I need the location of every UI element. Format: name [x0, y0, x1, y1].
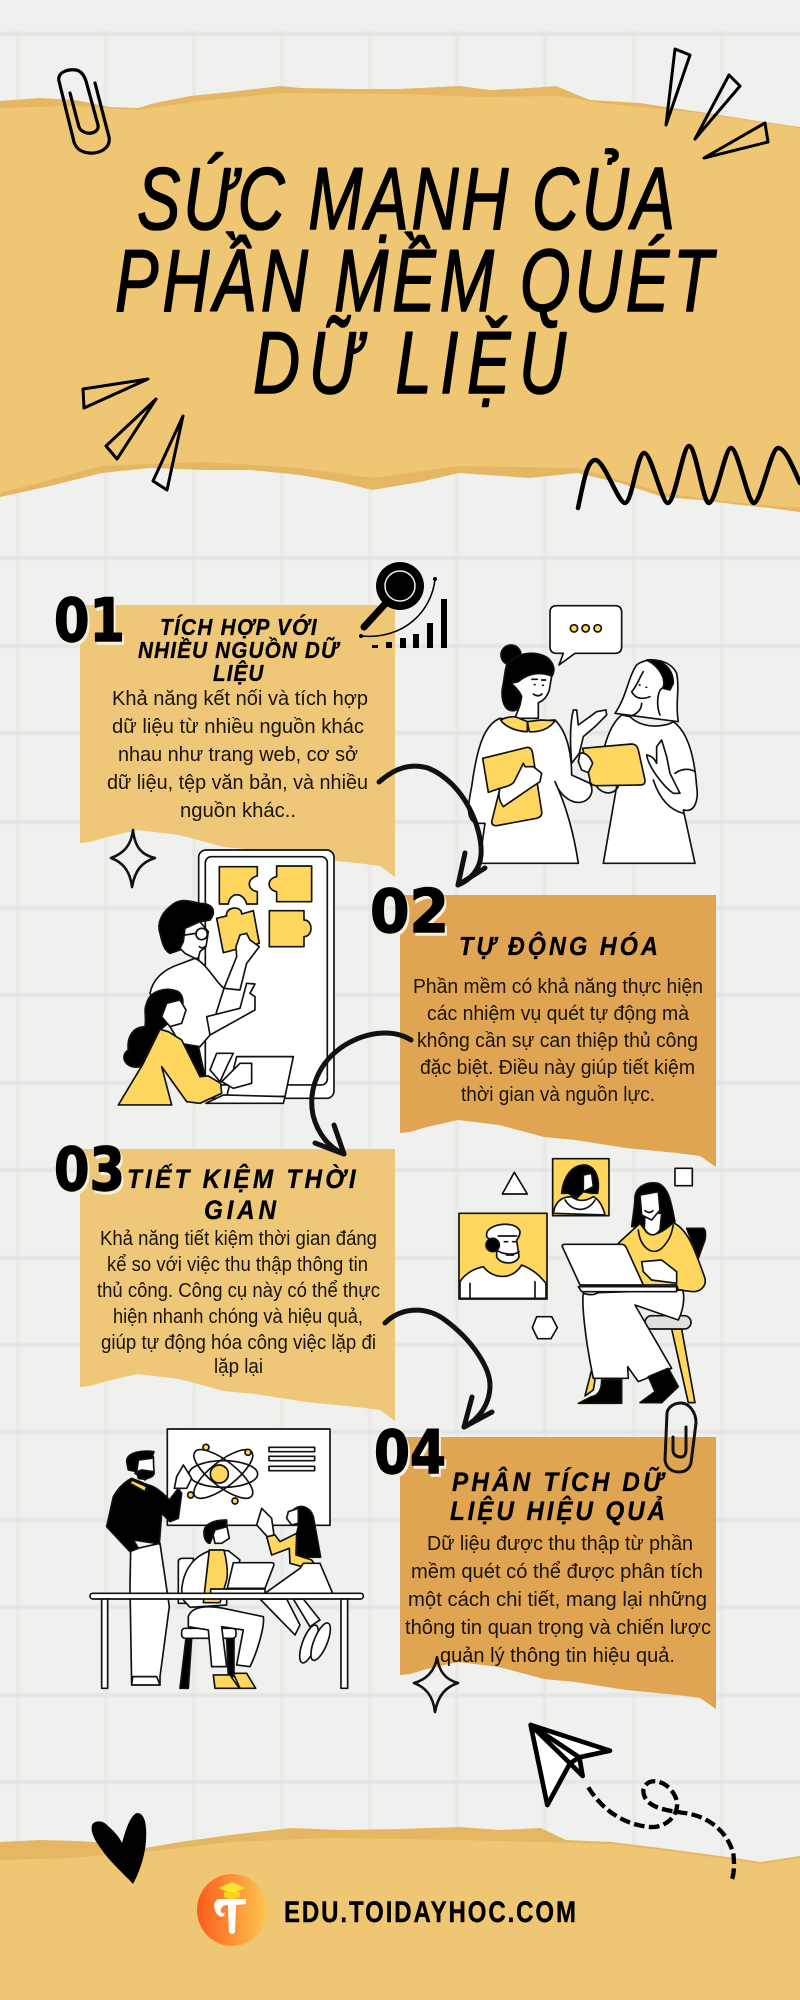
number 01: 01 [54, 586, 125, 656]
standing man [150, 901, 259, 1077]
panel 3 body text: lặp lại [214, 1356, 263, 1378]
illustration: puzzle board team [118, 850, 334, 1105]
website text: EDU.TOIDAYHOC.COM [284, 1894, 576, 1929]
panel 3 body text: giúp tự động hóa công việc lặp đi [101, 1332, 376, 1354]
panel 1 body text: nguồn khác.. [180, 800, 296, 822]
icon: paperclip right [665, 1403, 696, 1472]
panel 3 body text: Khả năng tiết kiệm thời gian đáng [100, 1228, 377, 1250]
left woman [469, 645, 607, 863]
seated man [178, 1520, 264, 1688]
arrow 2 to 3 [312, 1033, 411, 1154]
panel 4 body text: quản lý thông tin hiệu quả. [440, 1645, 675, 1667]
icon: heart [92, 1813, 146, 1884]
video frame: woman [553, 1159, 609, 1216]
illustration: woman on video call [459, 1159, 706, 1403]
icon: paper plane [531, 1725, 610, 1805]
whiteboard with atom [167, 1429, 330, 1525]
panel 2 body text: không cần sự can thiệp thủ công [417, 1030, 698, 1052]
icon: paperclip top-left [59, 70, 109, 153]
number 03: 03 [54, 1135, 125, 1205]
number 04: 04 [376, 1421, 448, 1491]
panel 1 heading: TÍCH HỢP VỚI [160, 614, 317, 640]
panel 1 body text [107, 688, 368, 822]
panel 1 heading: NHIỀU NGUỒN DỮ [138, 637, 341, 663]
panel 2 body text: đặc biệt. Điều này giúp tiết kiệm [420, 1057, 695, 1079]
number 01: 01 [56, 589, 127, 659]
panel 4 body text: Dữ liệu được thu thập từ phần [427, 1533, 693, 1555]
illustration: two women talking [469, 606, 697, 863]
panel 2: background paper [400, 895, 716, 1167]
board [199, 850, 334, 1098]
seated woman with laptop [562, 1183, 705, 1403]
video frame: man [459, 1213, 547, 1299]
chair [585, 1228, 706, 1403]
panel 4: background paper [400, 1437, 716, 1709]
panel 2 body text [413, 976, 703, 1106]
icon: magnifier and bar chart [359, 562, 447, 648]
panel 1 heading: LIỆU [213, 660, 265, 686]
panel 1 body text: dữ liệu từ nhiều nguồn khác [112, 716, 364, 738]
sitting woman [257, 1507, 334, 1665]
star 1 [111, 830, 155, 887]
panel 2 body text: các nhiệm vụ quét tự động mà [427, 1003, 690, 1025]
panel 3: background paper [80, 1149, 395, 1421]
arrow 3 to 4 [385, 1310, 492, 1427]
dashed flight path [588, 1781, 734, 1880]
standing man [107, 1451, 192, 1685]
table and laptop [90, 1563, 363, 1688]
panel 2 body text: Phần mềm có khả năng thực hiện [413, 976, 703, 998]
number 02: 02 [372, 880, 451, 950]
panel 4 body text: thông tin quan trọng và chiến lược [405, 1617, 711, 1639]
top banner: torn paper [0, 86, 800, 512]
number 04: 04 [374, 1418, 446, 1488]
number 03: 03 [56, 1138, 127, 1208]
panel 3 body text: hiện nhanh chóng và hiệu quả, [113, 1306, 363, 1328]
puzzle pieces [217, 866, 312, 953]
laptop [206, 1053, 293, 1103]
panel 1 body text: dữ liệu, tệp văn bản, và nhiều [107, 772, 368, 794]
panel 4 body text: một cách chi tiết, mang lại những [408, 1589, 707, 1611]
panel 2 heading: TỰ ĐỘNG HÓA [459, 932, 658, 961]
panel 1 heading [138, 614, 341, 686]
illustration: team at whiteboard [90, 1429, 363, 1688]
logo [197, 1874, 267, 1946]
speech bubble [550, 606, 622, 665]
icon: spark lines left [83, 379, 183, 490]
panel 1 body text: Khả năng kết nối và tích hợp [112, 688, 368, 710]
floating shapes [502, 1168, 692, 1339]
panel 4 body text [405, 1533, 711, 1667]
title: PHẦN MỀM QUÉT [115, 231, 717, 330]
bottom banner: torn paper [0, 1827, 800, 2000]
panel 3 body text: kể so với việc thu thập thông tin [107, 1254, 368, 1276]
panel 3 body text: thủ công. Công cụ này có thể thực [97, 1280, 380, 1302]
panel 1 body text: nhau như trang web, cơ sở [118, 744, 358, 766]
panel 1: background paper [80, 605, 395, 877]
title [115, 148, 717, 412]
right woman [578, 660, 697, 863]
star 2 [414, 1657, 458, 1712]
panel 4 heading: LIỆU HIỆU QUẢ [450, 1495, 665, 1526]
panel 3 heading: GIAN [204, 1196, 276, 1225]
number 02: 02 [370, 877, 449, 947]
title: DỮ LIỆU [253, 315, 567, 412]
panel 3 heading: TIẾT KIỆM THỜI [127, 1163, 356, 1194]
icon: zigzag scribble [578, 446, 800, 508]
panel 4 heading: PHÂN TÍCH DỮ [452, 1466, 667, 1497]
panel 4 body text: mềm quét có thể được phân tích [411, 1561, 703, 1583]
arrow 1 to 2 [379, 766, 485, 885]
panel 2 body text: thời gian và nguồn lực. [461, 1084, 655, 1106]
seated woman [118, 989, 222, 1105]
panel 3 body text [97, 1228, 380, 1378]
title: SỨC MẠNH CỦA [137, 148, 675, 248]
panel 4 heading [450, 1466, 667, 1526]
icon: spark lines top-right [666, 49, 768, 158]
panel 3 heading [127, 1163, 356, 1225]
